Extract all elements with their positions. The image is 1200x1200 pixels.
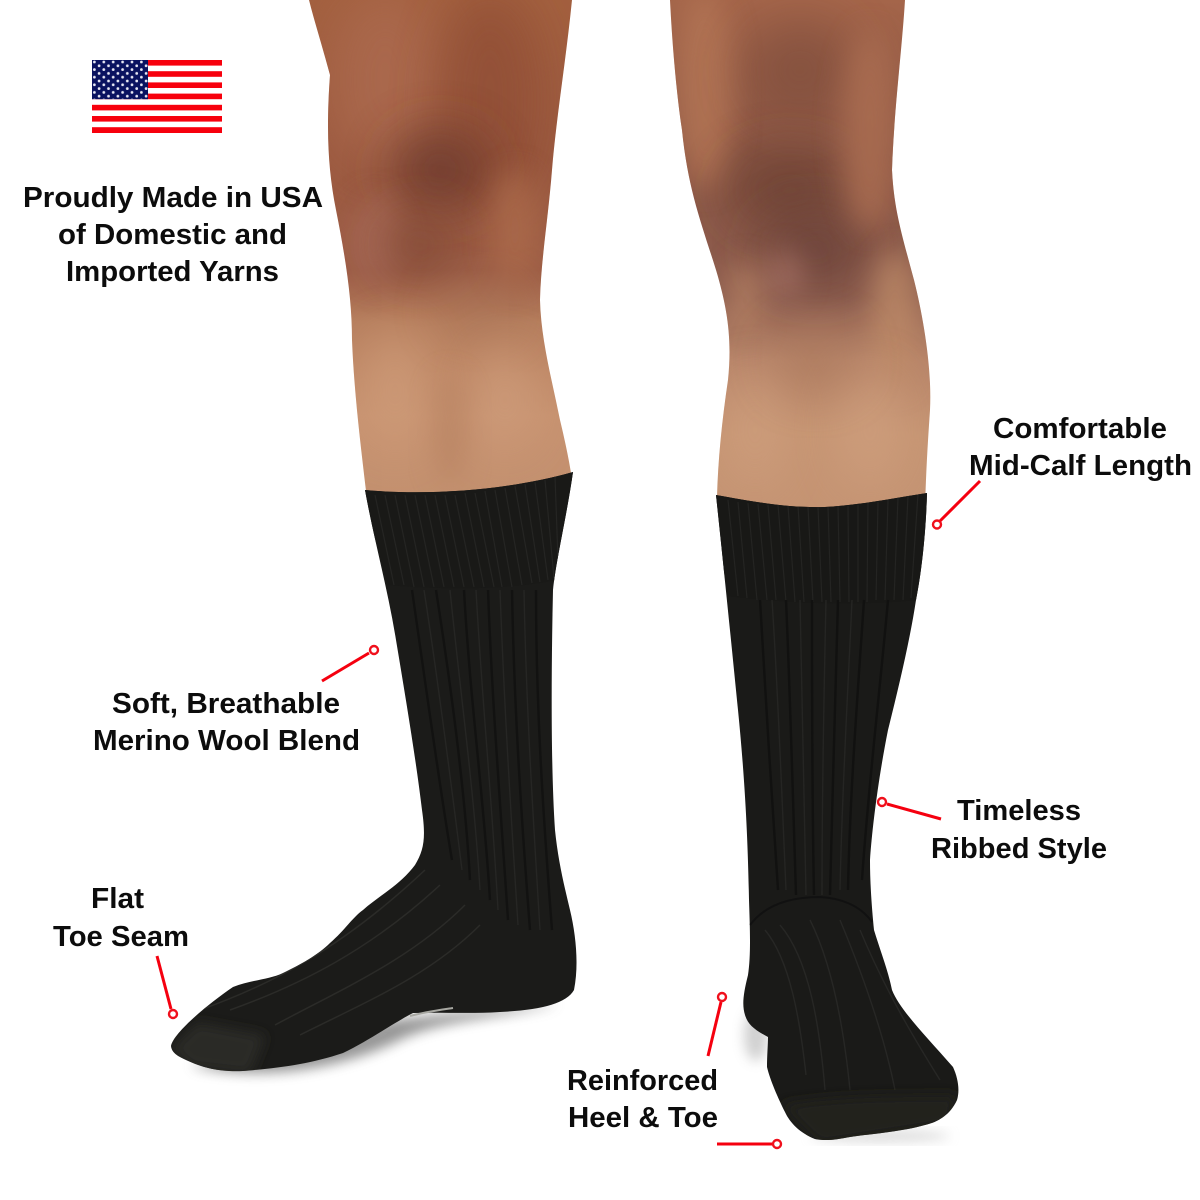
right sock toe: [780, 1095, 958, 1145]
text: made in USA: Imported Yarns: [66, 256, 279, 288]
callout: reinforced heel and toe: [567, 993, 781, 1148]
callout: reinforced heel and toe: Heel & Toe: [568, 1102, 718, 1134]
callout: mid-calf length: Comfortable: [993, 413, 1167, 445]
callout: reinforced heel and toe: Reinforced: [567, 1065, 718, 1097]
photo: left leg skin: [309, 0, 572, 492]
callout: ribbed style: Ribbed Style: [931, 833, 1107, 865]
callout: ribbed style: [878, 795, 1107, 865]
photo: right leg skin: [670, 0, 930, 508]
left sock foot ribs: [200, 870, 480, 1035]
callout: merino wool blend: Soft, Breathable: [112, 688, 340, 720]
shadow under right foot: [810, 1131, 950, 1141]
right sock cuff: [716, 493, 927, 600]
text: made in USA: Proudly Made in USA: [23, 182, 323, 214]
right sock foot ribs: [765, 920, 940, 1090]
callout: flat toe seam: Toe Seam: [53, 921, 189, 953]
callout: mid-calf length: Mid-Calf Length: [969, 450, 1192, 482]
text: made in USA: of Domestic and: [58, 219, 287, 251]
sock logo on sole: [410, 1008, 453, 1016]
text: made in USA: [23, 182, 323, 288]
callout: ribbed style: Timeless: [957, 795, 1081, 827]
callout: merino wool blend: Merino Wool Blend: [93, 725, 360, 757]
callout: mid-calf length: [933, 413, 1192, 528]
shadow under left foot: [190, 1004, 560, 1073]
left sock toe: [171, 1024, 262, 1072]
callout: flat toe seam: Flat: [91, 883, 144, 915]
left sock: [160, 460, 590, 1080]
icon: American flag: [92, 60, 222, 133]
shadow beside right foot: [744, 1009, 768, 1061]
callout: flat toe seam: [53, 883, 189, 1018]
right sock: [716, 493, 958, 1140]
callout: merino wool blend: [93, 646, 378, 757]
left sock cuff: [365, 472, 573, 580]
right sock ankle fold: [750, 897, 872, 925]
